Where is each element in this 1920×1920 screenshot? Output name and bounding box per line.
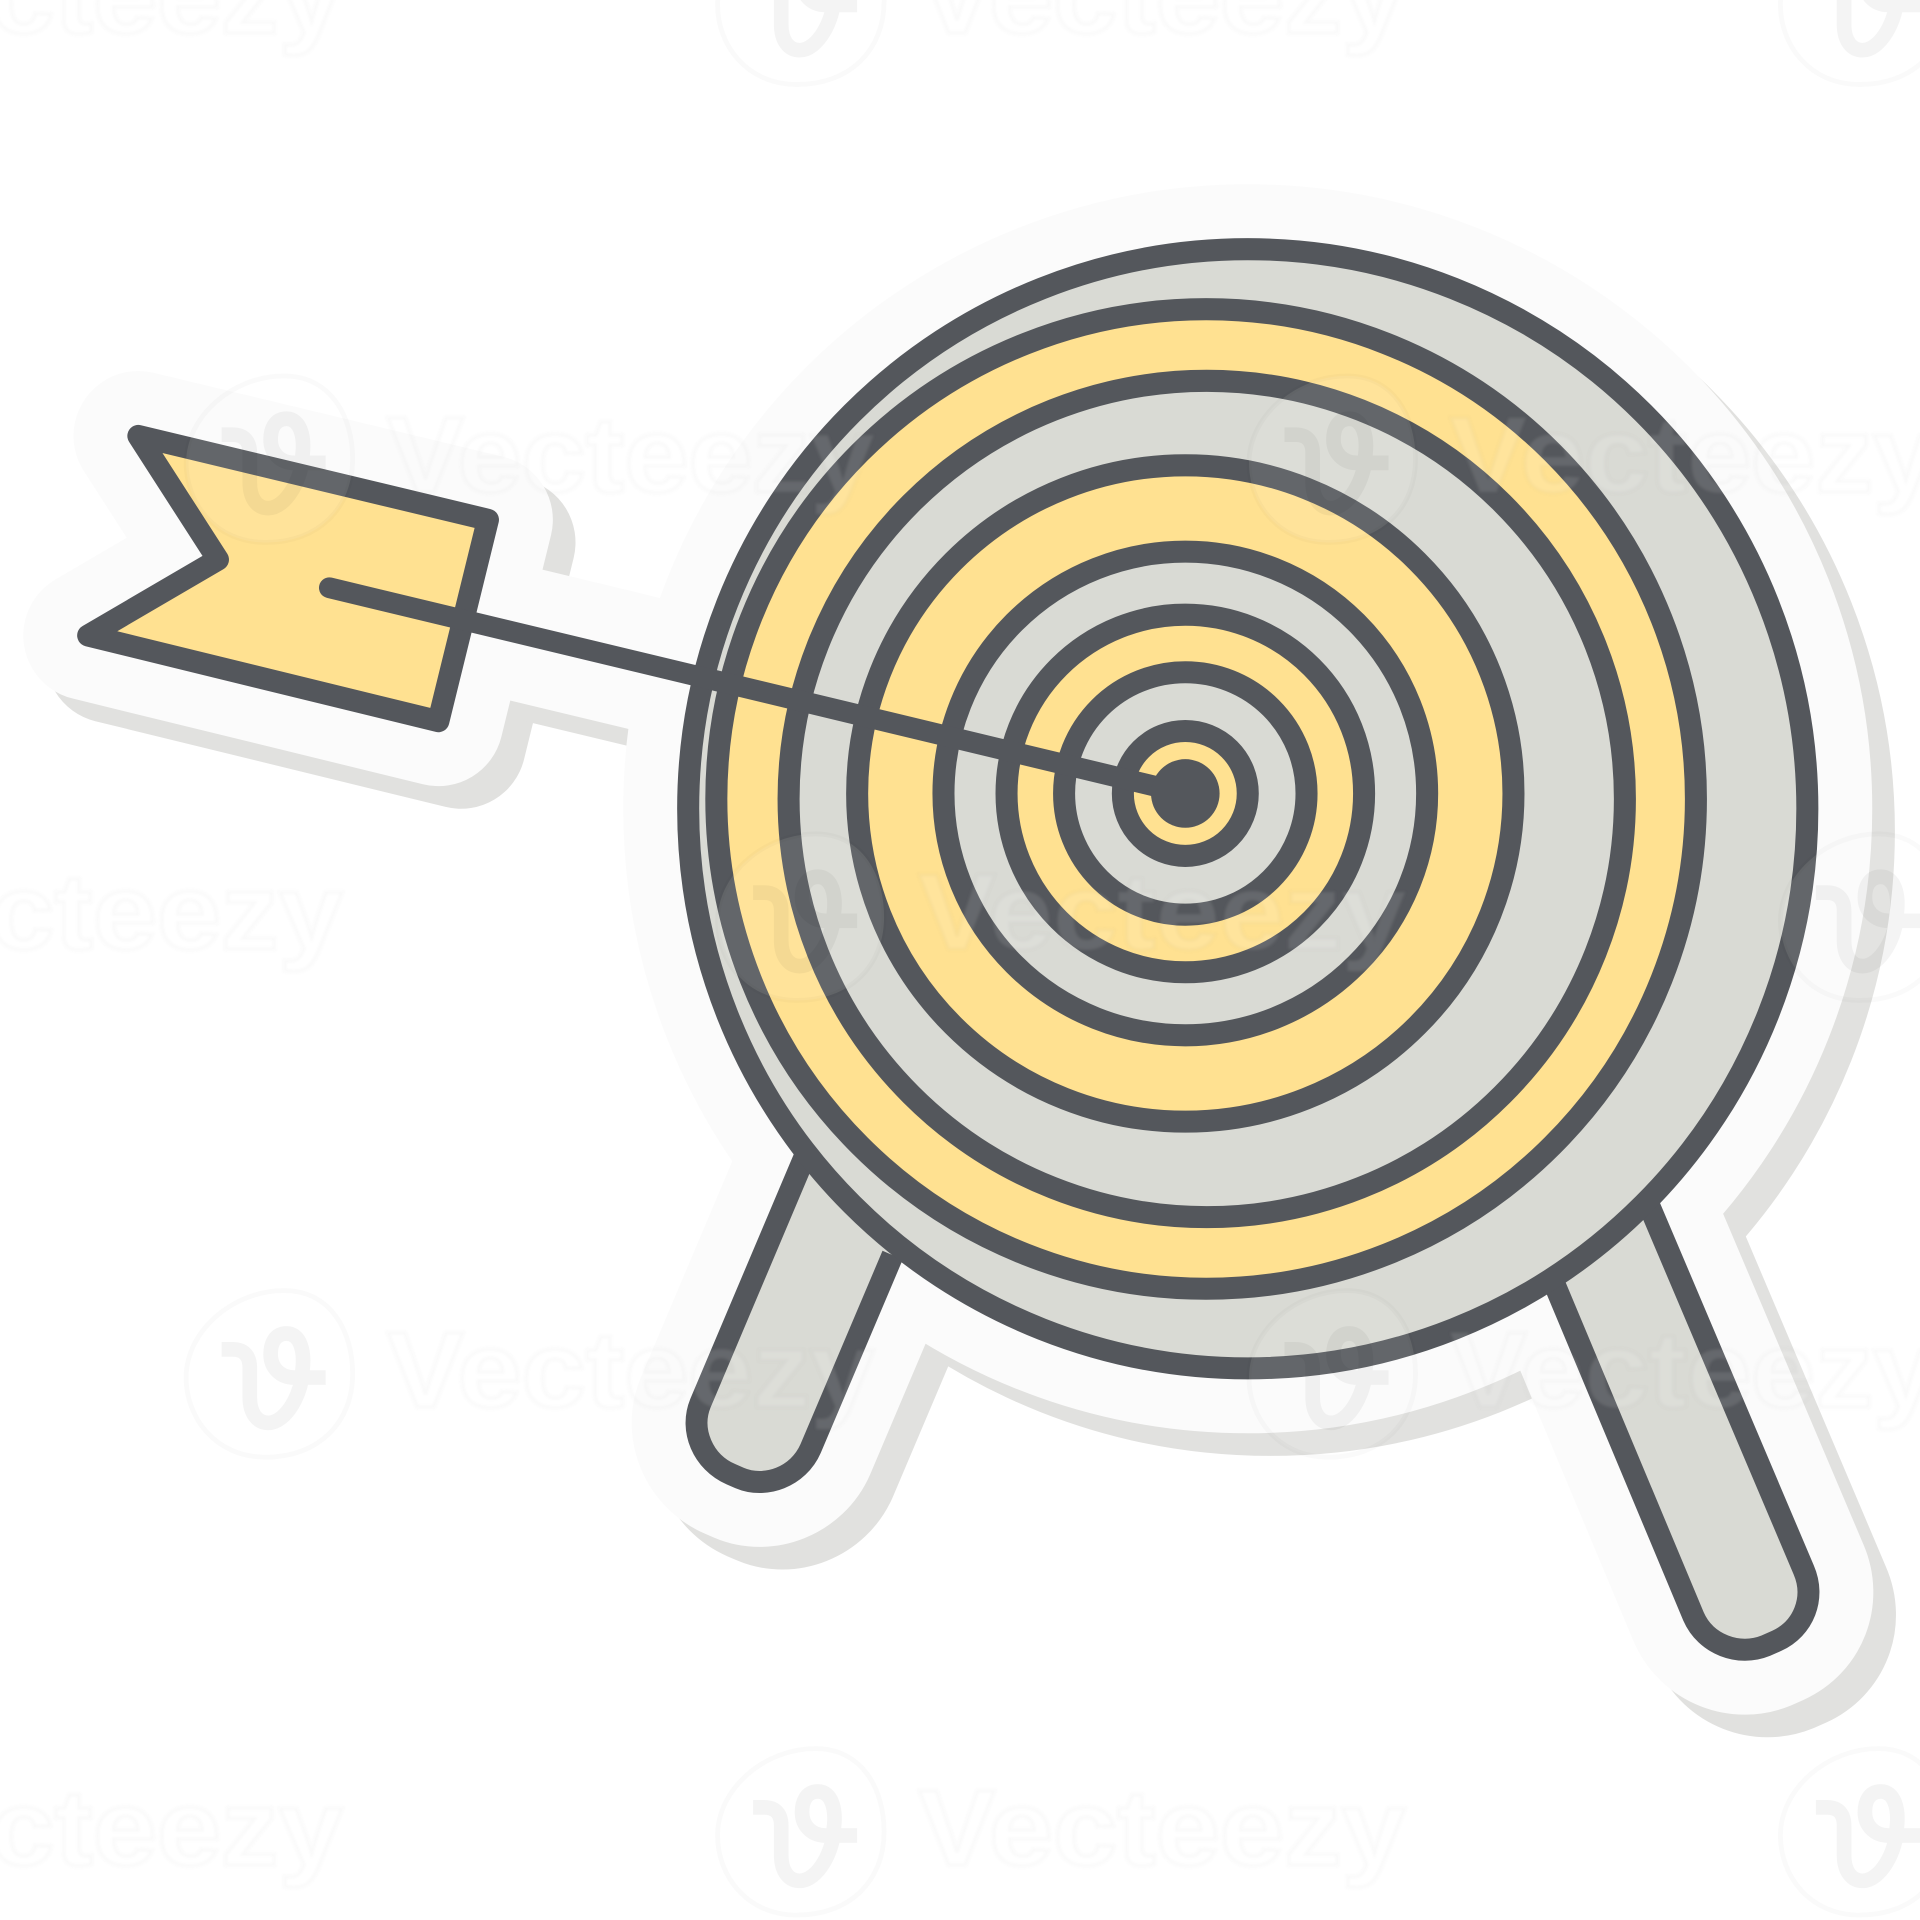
watermark row 1 <box>0 0 1920 84</box>
watermark row 3: Vecteezy <box>918 851 1406 972</box>
watermark row 5: Vecteezy <box>918 1767 1406 1888</box>
watermark row 2 <box>186 376 1920 542</box>
watermark row 4: Vecteezy <box>1450 1309 1920 1430</box>
arrow fletching <box>88 436 488 721</box>
bullseye centre <box>1151 759 1220 828</box>
watermark row 5 <box>0 1749 1920 1915</box>
arrow shaft <box>329 588 1185 793</box>
right stand leg <box>1555 1206 1808 1650</box>
watermark row 2: Vecteezy <box>387 394 874 515</box>
watermark row 3 <box>0 834 1920 1000</box>
sticker white backing <box>88 249 1808 1650</box>
target rings <box>688 249 1807 1368</box>
watermark row 4: Vecteezy <box>387 1309 874 1430</box>
watermark row 2: Vecteezy <box>1450 394 1920 515</box>
watermark row 4 <box>186 1291 1920 1457</box>
sticker drop shadow <box>111 272 1831 1672</box>
left stand leg <box>697 1157 893 1482</box>
